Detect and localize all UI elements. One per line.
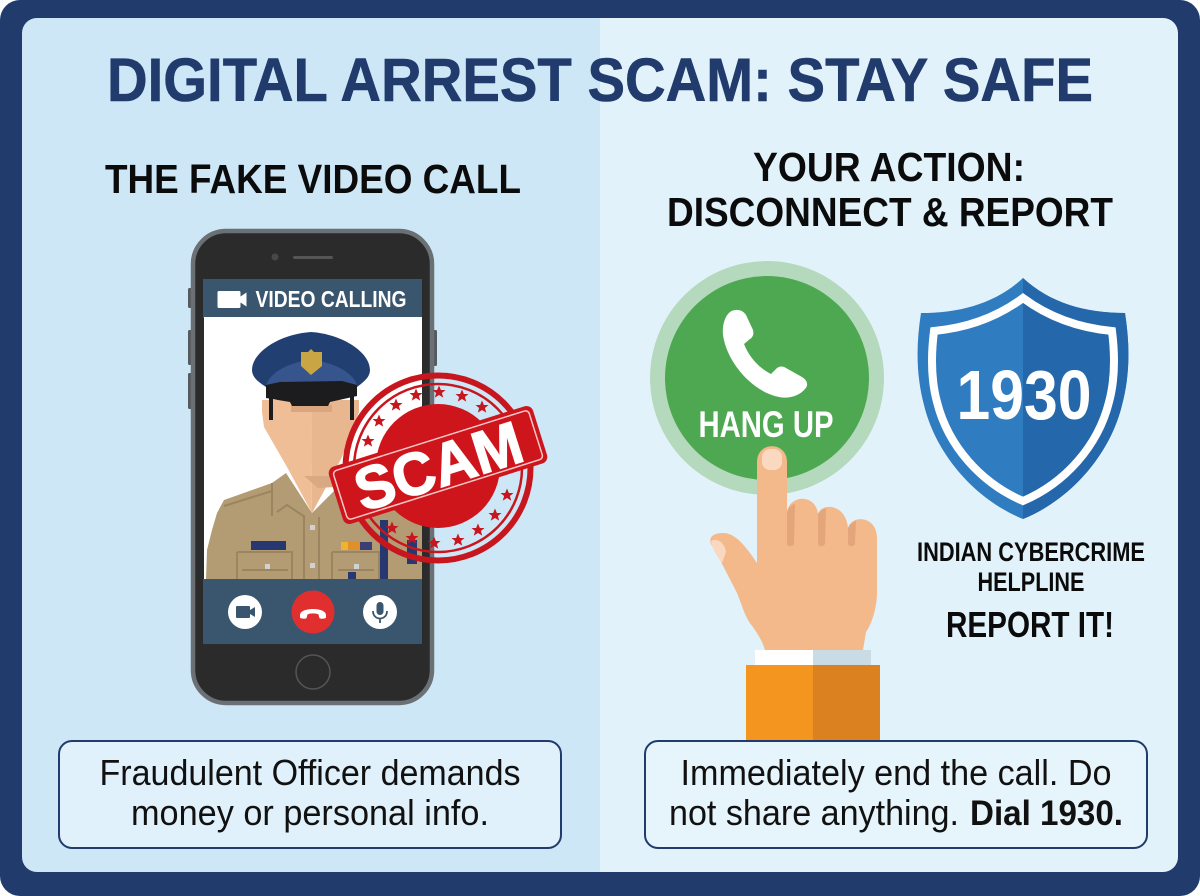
scam stamp	[326, 376, 551, 560]
officer shirt details	[224, 483, 417, 580]
callout: right: Immediately end the call. Do	[680, 752, 1112, 793]
hang up button	[650, 261, 884, 495]
stamp stars	[362, 386, 514, 549]
icon: phone handset	[723, 310, 807, 398]
phone camera and speaker	[272, 254, 333, 260]
phone call controls	[203, 579, 422, 644]
home button	[296, 655, 330, 689]
thumbnail	[711, 540, 726, 563]
officer uniform	[206, 473, 422, 580]
phone illustration	[188, 231, 437, 703]
icon: video camera	[218, 291, 246, 308]
helpline shield: 1930	[956, 356, 1092, 434]
shirt cuff	[755, 650, 871, 665]
icon: microphone button	[363, 595, 397, 629]
phone body	[193, 231, 432, 703]
helpline shield	[918, 278, 1128, 519]
hand	[710, 446, 877, 650]
officer face	[262, 400, 359, 513]
helpline label	[917, 537, 1145, 597]
stamp banner: SCAM	[346, 409, 531, 524]
panel: left background	[22, 18, 600, 872]
callout: right: not share anything.	[669, 792, 959, 833]
heading: your action	[667, 144, 1113, 235]
fingernail	[762, 449, 782, 470]
stamp rings	[346, 376, 530, 560]
report it: REPORT IT!	[946, 604, 1114, 645]
jacket sleeve	[746, 665, 880, 740]
hang up button: HANG UP	[698, 404, 834, 445]
hand pressing button	[710, 446, 880, 740]
heading: the fake video call: THE FAKE VIDEO CALL	[105, 156, 521, 202]
icon: camera button	[228, 595, 262, 629]
callout: left	[59, 741, 561, 848]
finger creases	[787, 504, 856, 546]
callout: left: money or personal info.	[131, 792, 489, 833]
helpline label: INDIAN CYBERCRIME	[917, 537, 1145, 567]
callout: right: Dial 1930.	[970, 794, 1123, 833]
video feed: police officer	[204, 317, 422, 580]
stamp centre	[376, 404, 500, 528]
officer cap	[252, 332, 370, 420]
helpline label: HELPLINE	[978, 567, 1084, 597]
callout: right	[645, 741, 1147, 848]
panel: right background	[600, 18, 1178, 872]
phone screen header	[203, 279, 422, 318]
title: DIGITAL ARREST SCAM: STAY SAFE	[107, 46, 1093, 114]
phone side buttons	[188, 288, 437, 409]
icon: end call button	[292, 590, 334, 634]
phone screen header: VIDEO CALLING	[256, 286, 406, 312]
heading: your action: DISCONNECT & REPORT	[667, 189, 1113, 235]
callout: left: Fraudulent Officer demands	[100, 752, 520, 793]
heading: your action: YOUR ACTION:	[753, 144, 1025, 190]
